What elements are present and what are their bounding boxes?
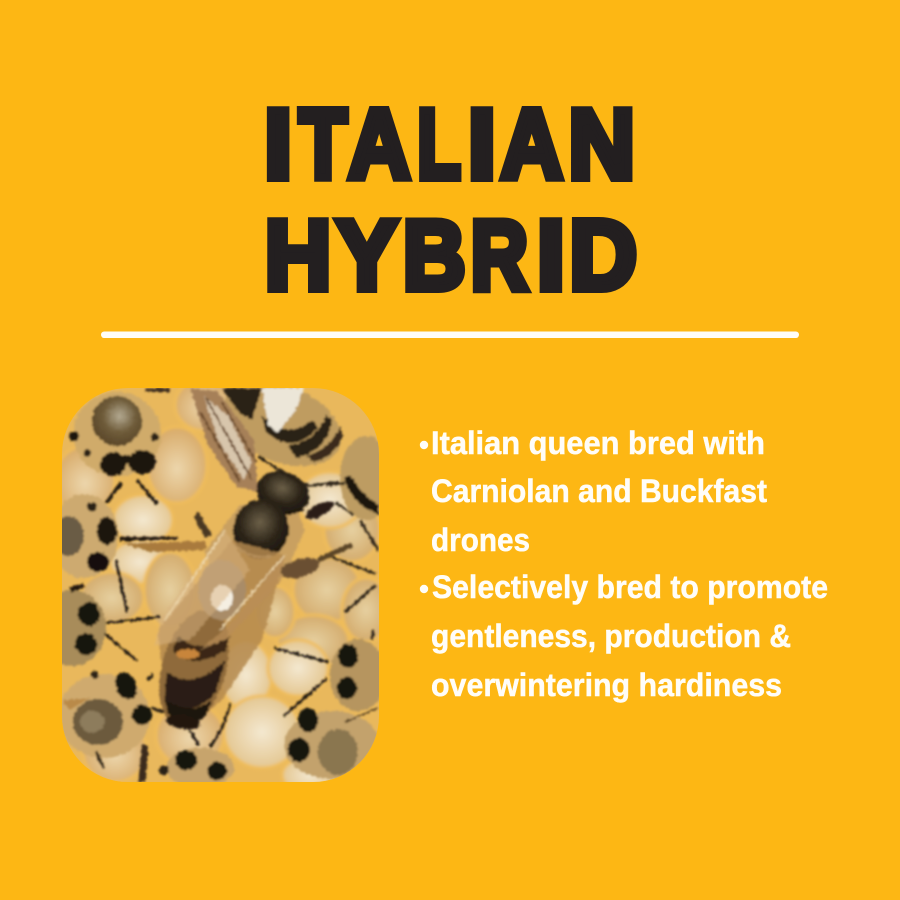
- bullet list: [420, 425, 828, 703]
- title: A: [348, 89, 410, 199]
- bee: bottom left: [58, 669, 164, 768]
- bees: [62, 388, 379, 782]
- title: H: [265, 200, 331, 310]
- bullet item: Italian queen: drones: [431, 522, 530, 558]
- title: L: [417, 89, 461, 199]
- bullet item: Selectively bred: Selectively bred to promote: [432, 569, 828, 605]
- divider line: [101, 332, 799, 338]
- bullet item: Italian queen: Carniolan and Buckfast: [431, 473, 767, 509]
- bee: left middle: [50, 494, 205, 612]
- bullet item: Selectively bred: gentleness, production &: [431, 618, 791, 654]
- title: B: [403, 200, 466, 310]
- bullet item: Selectively bred: overwintering hardiness: [431, 667, 782, 703]
- title: T: [299, 89, 347, 199]
- bullet item: Italian queen: [420, 425, 767, 558]
- bee: top left: [69, 390, 170, 504]
- bee: top right abdomen: [190, 366, 354, 492]
- bullet item: Italian queen: Italian queen bred with: [431, 425, 765, 461]
- queen bee: [120, 456, 352, 734]
- comb background: [62, 388, 379, 782]
- photo: bees on honeycomb: [62, 388, 379, 782]
- title: R: [471, 200, 528, 310]
- bee: right edge: [324, 435, 379, 614]
- bullet item: Selectively bred: [420, 569, 828, 703]
- title: Y: [336, 200, 397, 310]
- title: I: [264, 89, 292, 199]
- title: D: [570, 200, 637, 310]
- title: I: [468, 89, 496, 199]
- bee: left lower: [62, 582, 162, 668]
- title: [264, 89, 637, 310]
- title: N: [569, 89, 635, 199]
- honeycomb cells: [55, 379, 390, 793]
- title: A: [501, 89, 563, 199]
- title: I: [537, 200, 565, 310]
- bee: bottom right pair: [274, 630, 386, 779]
- bee: bottom centre: [142, 703, 234, 788]
